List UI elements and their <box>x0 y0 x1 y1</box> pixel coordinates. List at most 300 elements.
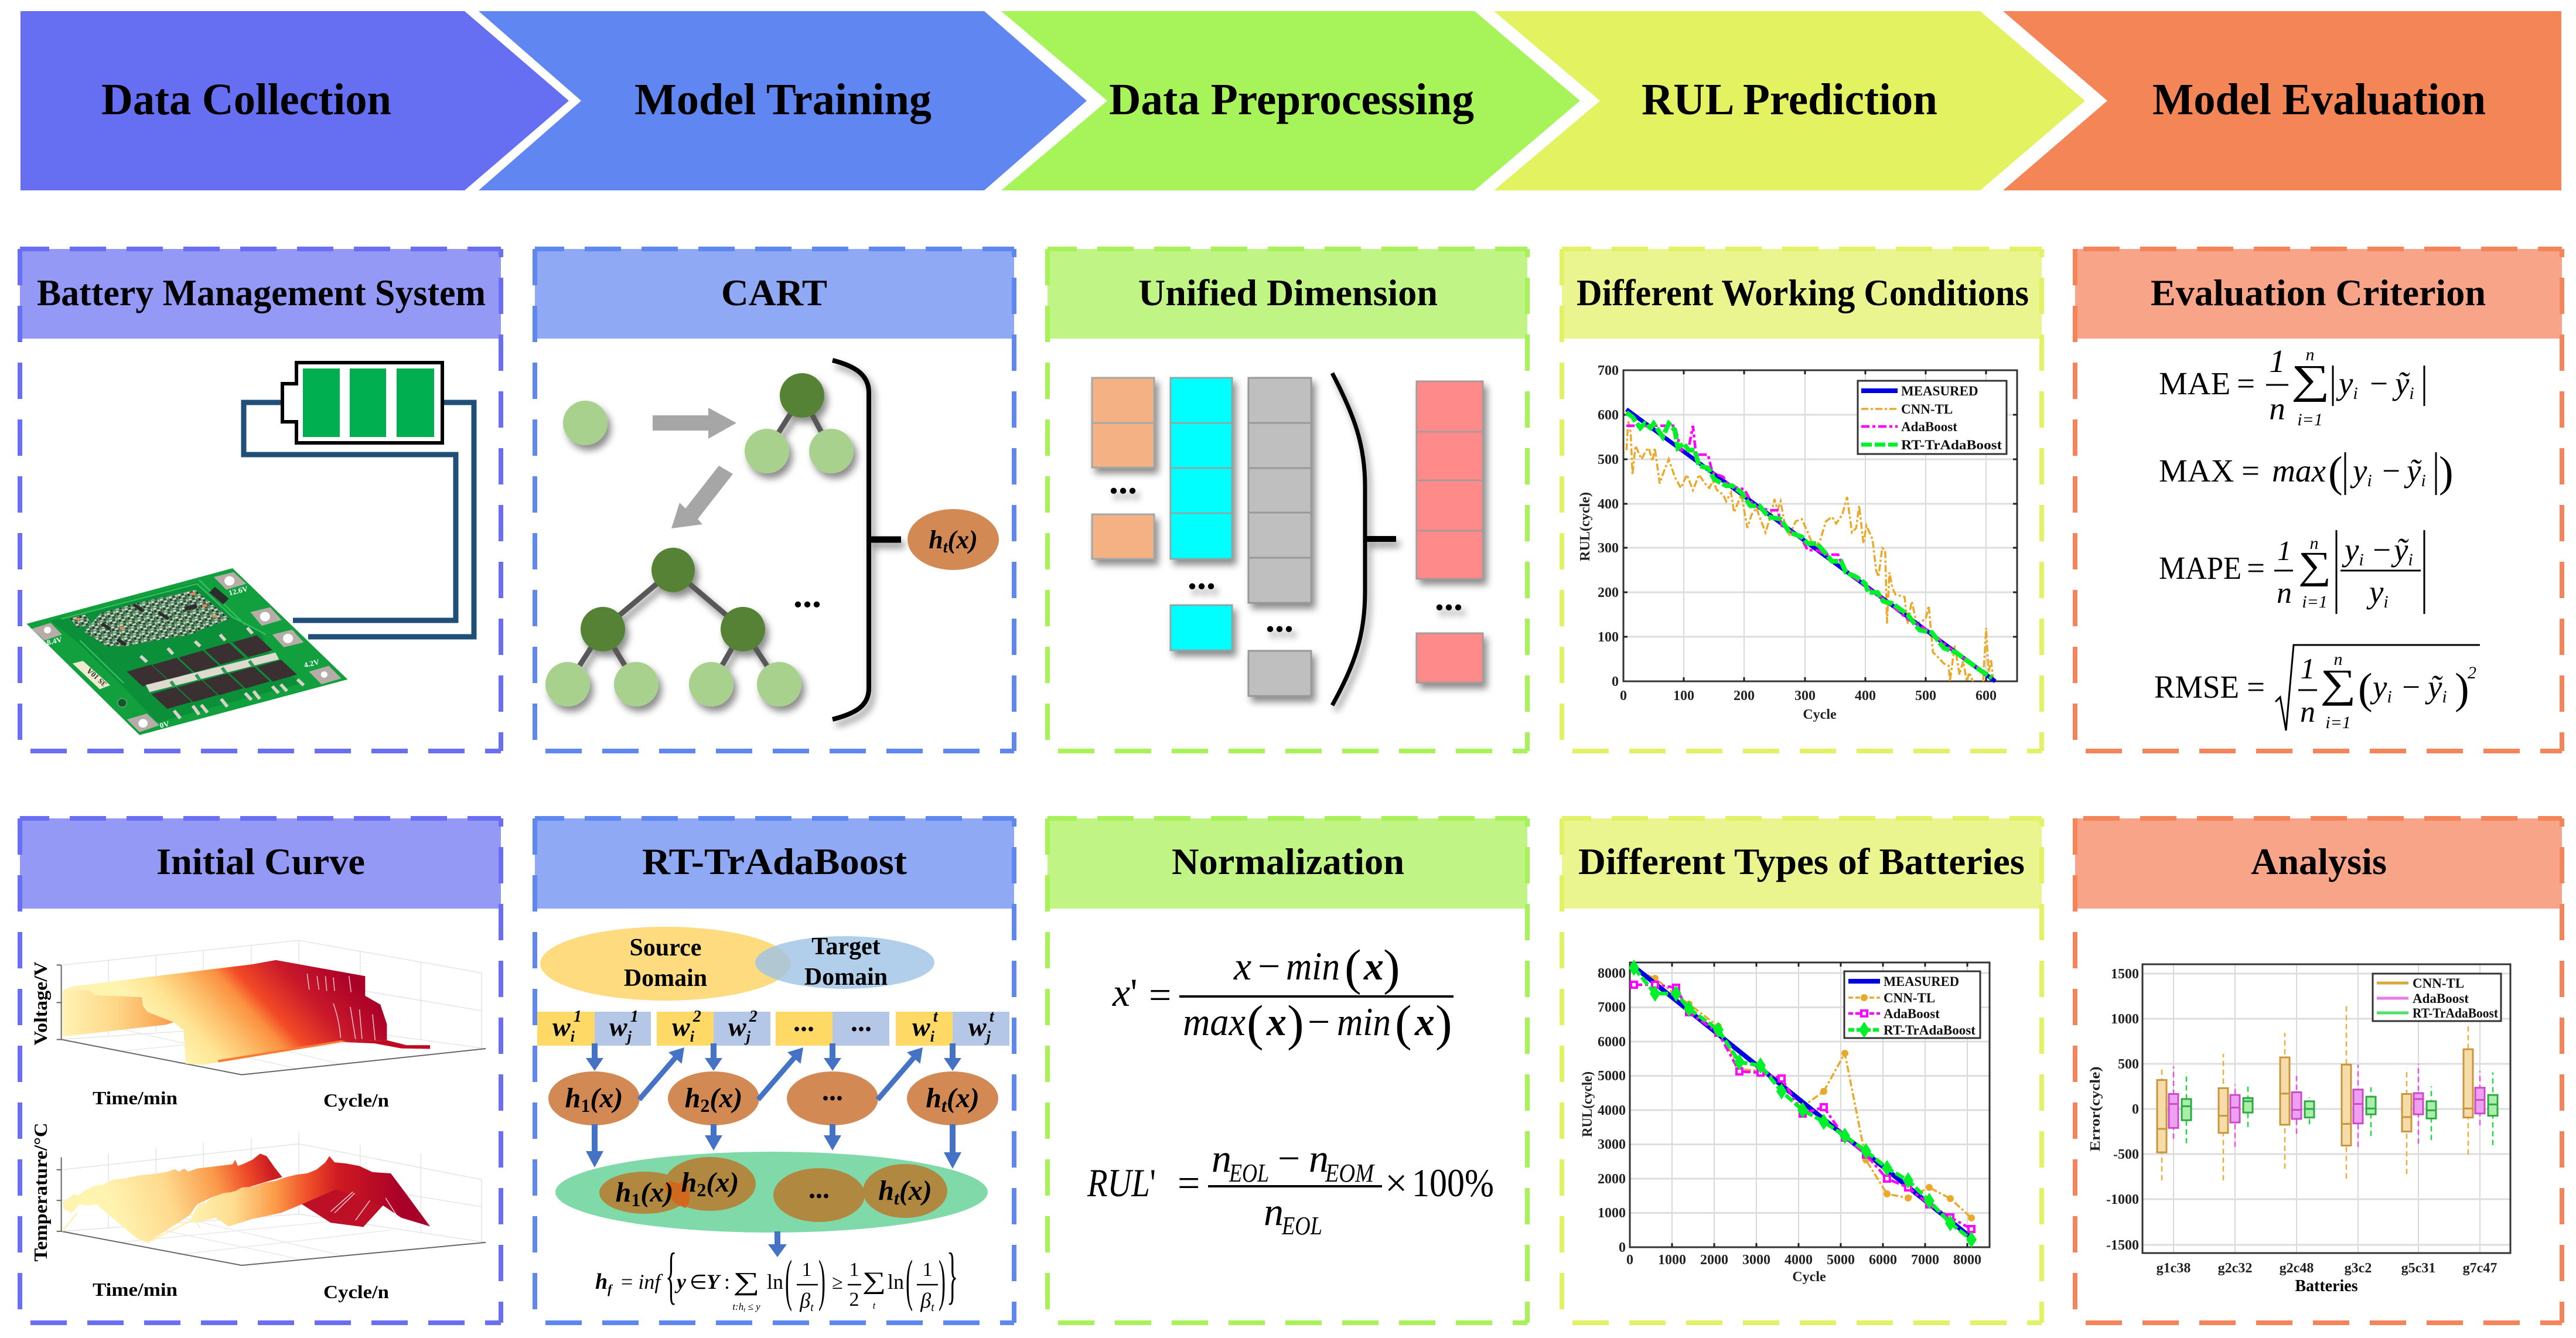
formula: RMSE: 1 <box>2300 652 2315 685</box>
formula: final hypothesis: 2 <box>849 1289 859 1310</box>
ellipsis: ... <box>793 574 821 615</box>
weight cells: 1 <box>630 1008 639 1026</box>
board labels: 0V <box>159 719 170 730</box>
formula: MAPE: i <box>2408 550 2413 569</box>
arrows: learner to next weights <box>637 1047 923 1101</box>
domain: source <box>540 927 791 1001</box>
box plot: error by battery: g2c32 <box>2218 1261 2252 1276</box>
board transistors <box>127 636 297 709</box>
formula: RMSE: i <box>2387 687 2392 706</box>
formula: MAE: − <box>2370 366 2388 401</box>
box plot: error by battery: g7c47 <box>2463 1261 2497 1276</box>
formula: final hypothesis: h <box>595 1269 608 1294</box>
formula: RMSE: i <box>2442 687 2447 706</box>
box plot: error by battery: 1000 <box>2111 1012 2139 1027</box>
formula: final hypothesis: t <box>931 1301 934 1314</box>
line chart: working conditions: 500 <box>1915 688 1936 704</box>
formula: MAPE: i=1 <box>2302 592 2328 612</box>
weak learners <box>548 1071 998 1125</box>
boxes: g5c31 <box>2402 1064 2436 1174</box>
node: ht(x): t <box>943 538 948 557</box>
line chart: working conditions: 700 <box>1598 363 1619 378</box>
line chart: battery types: 0 <box>1619 1240 1626 1255</box>
box plot: error by battery: g1c38 <box>2157 1261 2191 1276</box>
formula: RMSE: 2 <box>2468 663 2476 682</box>
legend <box>1858 381 2007 454</box>
ensemble: (x) <box>706 1167 739 1198</box>
formula: MAPE: i <box>2359 550 2364 569</box>
line chart: battery types: 2000 <box>1700 1252 1728 1268</box>
root node <box>563 401 608 445</box>
line chart: working conditions: 200 <box>1598 585 1619 600</box>
weight cells: ... <box>793 1006 814 1037</box>
heading: Different Working Conditions: Different Working Conditions <box>1577 272 2029 313</box>
weight cells: t <box>933 1008 939 1026</box>
line chart: working conditions: 600 <box>1598 408 1619 423</box>
line chart: working conditions: 0 <box>1620 688 1627 704</box>
formula: RUL normalization: RUL' <box>1087 1160 1156 1205</box>
weight cells: i <box>571 1028 575 1045</box>
formula: final hypothesis: t <box>810 1301 814 1314</box>
step: Data Preprocessing <box>1001 11 1580 190</box>
panel: CART <box>535 249 1014 751</box>
weight cells: j <box>744 1028 751 1045</box>
formula: final hypothesis: ≤ y <box>745 1301 760 1312</box>
formula: MAE: MAE <box>2159 366 2230 401</box>
formula: MAE: 1 <box>2269 343 2285 379</box>
formula: min-max normalization: ( <box>1395 995 1412 1051</box>
ellipsis marks: ... <box>1109 460 1137 501</box>
weight cells <box>537 1006 1009 1046</box>
step: Model Evaluation <box>2003 11 2561 190</box>
legend: MEASURED <box>1884 974 1959 989</box>
boxes: g7c47 <box>2464 1023 2497 1155</box>
formula: final hypothesis: 1 <box>801 1259 812 1281</box>
heading: Initial Curve: Initial Curve <box>156 841 365 882</box>
formula: MAPE: 1 <box>2277 535 2291 566</box>
column: cyan data <box>1171 378 1232 650</box>
formula: MAPE: = <box>2247 550 2265 586</box>
formula: MAX: = <box>2241 453 2260 489</box>
formula: MAE: n <box>2306 345 2314 364</box>
line chart: battery types: 4000 <box>1785 1252 1813 1268</box>
formula: MAE: = <box>2237 366 2255 401</box>
weight cells: j <box>984 1028 991 1045</box>
formula: RMSE: n <box>2300 695 2315 729</box>
formula: RUL normalization: EOL <box>1229 1159 1269 1187</box>
formula: RMSE: y <box>2373 669 2387 705</box>
weight cells: ... <box>851 1006 872 1037</box>
legend: AdaBoost <box>1901 419 1957 434</box>
formula: MAX: ỹ <box>2407 453 2421 489</box>
heading: Unified Dimension: Unified Dimension <box>1138 272 1438 313</box>
boxes: g1c38 <box>2157 1066 2191 1180</box>
wires between battery and board <box>244 402 474 637</box>
box plot: error by battery: g2c48 <box>2280 1261 2314 1276</box>
formula: final hypothesis: y <box>674 1270 687 1293</box>
weight cells: w <box>968 1012 987 1042</box>
formula: final hypothesis: t <box>743 1306 746 1313</box>
formula: min-max normalization: = <box>1149 972 1171 1017</box>
formula: final hypothesis: t:h <box>732 1301 743 1312</box>
domain labels <box>624 933 888 992</box>
formula: min-max normalization: x <box>1414 999 1435 1044</box>
panel: Initial Curve <box>20 818 501 1323</box>
formula: final hypothesis: f <box>608 1282 613 1296</box>
line chart: working conditions: 400 <box>1598 497 1619 512</box>
formula: min-max normalization: x <box>1363 944 1384 988</box>
arrow: grow right <box>653 408 736 439</box>
weak learners: ... <box>822 1076 843 1107</box>
ellipsis marks: ... <box>1435 576 1463 618</box>
formula: min-max normalization: max <box>1183 999 1246 1044</box>
formula: final hypothesis: } <box>947 1240 958 1310</box>
panel: Unified Dimension <box>1048 249 1527 751</box>
formula: MAX: ( <box>2328 448 2343 496</box>
formula: min-max normalization: ( <box>1247 995 1264 1051</box>
icon: circuit board <box>26 568 347 735</box>
formula: min-max normalization: x <box>1233 944 1251 988</box>
line chart: battery types: 2000 <box>1598 1172 1626 1187</box>
formula: final hypothesis: { <box>666 1240 677 1310</box>
box plot: error by battery: -1500 <box>2106 1238 2139 1253</box>
legend: AdaBoost <box>1884 1006 1940 1021</box>
board transistor pins <box>141 628 303 718</box>
box plot: error by battery <box>2088 964 2510 1295</box>
ensemble <box>555 1152 988 1233</box>
step: Model Evaluation: Model Evaluation <box>2152 75 2486 124</box>
node: ht(x): h <box>929 525 943 554</box>
formula: final hypothesis: β <box>920 1289 931 1312</box>
brace <box>832 360 901 719</box>
formula: MAPE: ỹ <box>2394 532 2408 568</box>
board labels: 12.6V <box>227 584 249 597</box>
line chart: battery types: 6000 <box>1598 1035 1626 1050</box>
formula: MAPE: − <box>2373 532 2391 568</box>
domain labels: Source <box>630 934 701 961</box>
weak learners: (x) <box>947 1083 980 1114</box>
weak learners: 1 <box>581 1095 590 1116</box>
weight cells: w <box>912 1012 930 1042</box>
surface chart: voltage: Voltage/V <box>30 962 51 1045</box>
formula: MAX: ) <box>2439 448 2454 496</box>
formula: MAE: y <box>2339 366 2353 401</box>
box plot: error by battery: -500 <box>2113 1147 2139 1162</box>
line chart: battery types: 8000 <box>1953 1252 1981 1268</box>
domain labels: Domain <box>804 964 888 991</box>
formula: MAPE: n <box>2277 576 2292 610</box>
formula: RMSE <box>2154 645 2480 732</box>
domain: target <box>755 936 934 989</box>
heading: Normalization: Normalization <box>1172 841 1404 882</box>
weight cells: w <box>552 1012 571 1042</box>
ensemble: h <box>681 1167 697 1198</box>
line chart: working conditions: RUL(cycle) <box>1578 492 1593 561</box>
line chart: battery types: 4000 <box>1598 1103 1626 1118</box>
step: Model Training <box>479 11 1087 190</box>
brace <box>1332 373 1396 705</box>
weight cells: i <box>690 1028 695 1045</box>
formula: final hypothesis: ln <box>888 1270 904 1293</box>
formula: final hypothesis: 1 <box>849 1259 859 1281</box>
panel: Different Types of Batteries <box>1562 818 2042 1323</box>
line chart: battery types: 6000 <box>1869 1252 1897 1268</box>
formula: min-max normalization: ) <box>1435 995 1452 1051</box>
formula: final hypothesis: ln <box>767 1270 783 1293</box>
column: gray data <box>1248 378 1311 696</box>
line chart: battery types: 5000 <box>1827 1252 1855 1268</box>
weak learners: h <box>565 1083 581 1114</box>
formula: MAE <box>2159 343 2424 429</box>
formula: min-max normalization: ( <box>1345 939 1362 995</box>
formula: final hypothesis: ( <box>906 1249 913 1312</box>
formula: RUL normalization: − <box>1278 1136 1300 1180</box>
formula: RUL normalization <box>1087 1136 1494 1240</box>
formula: MAE: ỹ <box>2395 366 2409 401</box>
surface chart: voltage: Time/min <box>93 1087 178 1108</box>
weight cells: t <box>990 1008 995 1026</box>
domain labels: Domain <box>624 965 707 992</box>
weak learners: h <box>685 1083 700 1114</box>
formula: final hypothesis: ( <box>785 1249 792 1312</box>
surface chart: voltage <box>30 940 486 1111</box>
formula: final hypothesis: β <box>800 1289 810 1312</box>
legend: RT-TrAdaBoost <box>1901 438 2002 452</box>
line chart: battery types: 3000 <box>1742 1252 1770 1268</box>
weight cells: w <box>728 1012 746 1042</box>
panel: Evaluation Criterion <box>2075 249 2562 751</box>
weak learners: t <box>941 1095 947 1116</box>
arrows: learners to ensemble <box>586 1124 961 1169</box>
line chart: battery types: 3000 <box>1598 1137 1626 1152</box>
line chart: battery types: 7000 <box>1598 1000 1626 1015</box>
process banner <box>21 11 2561 190</box>
weight cells: j <box>625 1028 632 1045</box>
box plot: error by battery: Batteries <box>2295 1277 2358 1295</box>
line chart: battery types: 7000 <box>1911 1252 1939 1268</box>
formula: final hypothesis: 1 <box>922 1259 933 1281</box>
formula: RMSE: n <box>2334 650 2342 669</box>
box plot: error by battery: g3c2 <box>2345 1261 2372 1276</box>
weight cells: i <box>930 1028 935 1045</box>
legend: MEASURED <box>1901 384 1978 398</box>
formula: RUL normalization: EOM <box>1325 1159 1375 1187</box>
formula: MAPE: y <box>2369 574 2383 610</box>
step: RUL Prediction: RUL Prediction <box>1642 75 1937 124</box>
weight cells: 2 <box>749 1008 758 1026</box>
ensemble: (x) <box>640 1177 673 1208</box>
heading: Battery Management System: Battery Management System <box>37 272 486 313</box>
formula: MAPE: i <box>2383 592 2389 612</box>
board labels: 8.4V <box>46 635 63 647</box>
panel: RT-TrAdaBoost <box>535 818 1014 1323</box>
formula: min-max normalization: x' <box>1112 970 1137 1015</box>
line chart: working conditions: 100 <box>1598 630 1619 645</box>
line chart: battery types: 1000 <box>1598 1206 1626 1221</box>
small tree <box>745 373 854 473</box>
line chart: working conditions: 300 <box>1598 541 1619 556</box>
panel: Different Working Conditions <box>1562 249 2042 751</box>
formula: MAX: y <box>2353 453 2367 489</box>
ensemble: 2 <box>697 1179 706 1200</box>
line chart: battery types <box>1580 960 1990 1285</box>
formula: MAPE: y <box>2345 532 2359 568</box>
formula: min-max normalization: min <box>1286 944 1340 988</box>
ellipsis marks <box>1109 460 1463 640</box>
step: Data Collection <box>21 11 569 190</box>
surface chart: temperature <box>30 1122 486 1302</box>
formula: MAX <box>2159 448 2454 496</box>
formula: MAE: n <box>2269 391 2285 426</box>
board pads <box>32 572 342 732</box>
board labels <box>46 584 320 730</box>
node: ht(x) <box>907 509 999 570</box>
line chart: working conditions: 500 <box>1598 452 1619 467</box>
formula: final hypothesis: ) <box>939 1249 946 1312</box>
formula: min-max normalization: min <box>1337 999 1391 1044</box>
formula: MAE: ∑ <box>2291 357 2330 402</box>
heading: CART: CART <box>721 272 827 313</box>
legend <box>1844 971 1980 1038</box>
weight cells: w <box>609 1012 627 1042</box>
surface chart: temperature: Cycle/n <box>323 1281 389 1302</box>
ellipsis marks: ... <box>1265 598 1294 640</box>
step: Data Preprocessing: Data Preprocessing <box>1109 75 1474 124</box>
panel: Analysis <box>2075 818 2562 1323</box>
formula: final hypothesis <box>595 1240 958 1314</box>
formula: final hypothesis: : <box>724 1270 730 1293</box>
arrow: grow down <box>671 466 733 528</box>
boxes: g3c2 <box>2342 1004 2376 1179</box>
line chart: working conditions: 600 <box>1975 688 1997 704</box>
column: unified output <box>1417 381 1483 682</box>
step: RUL Prediction <box>1494 11 2085 190</box>
formula: min-max normalization: − <box>1308 999 1330 1044</box>
ensemble: h <box>878 1175 894 1206</box>
formula: MAX: i <box>2367 471 2372 490</box>
ensemble: 1 <box>631 1189 640 1210</box>
box plot: error by battery: 500 <box>2118 1057 2139 1072</box>
panel: Normalization <box>1048 818 1527 1323</box>
ellipsis marks: ... <box>1188 555 1216 597</box>
formula: RMSE: i=1 <box>2325 713 2351 732</box>
legend: AdaBoost <box>2413 991 2469 1006</box>
line chart: working conditions: 100 <box>1673 688 1694 704</box>
formula: RMSE: ) <box>2455 665 2469 713</box>
line chart: working conditions: 200 <box>1734 688 1755 704</box>
weak learners: h <box>926 1083 941 1114</box>
line chart: working conditions: 0 <box>1612 674 1619 690</box>
line chart: battery types: RUL(cycle) <box>1580 1071 1595 1137</box>
formula: final hypothesis: ∈ <box>690 1272 707 1293</box>
legend <box>2373 974 2501 1021</box>
line chart: working conditions: 400 <box>1855 688 1876 704</box>
arrow: ensemble to final formula <box>768 1231 787 1257</box>
line chart: working conditions: Cycle <box>1803 707 1837 722</box>
boxes: g2c48 <box>2280 1033 2314 1169</box>
formula: RMSE: ∑ <box>2320 661 2356 706</box>
formula: MAPE: ∑ <box>2298 544 2331 586</box>
formula: MAE: i <box>2409 384 2414 403</box>
formula: MAPE <box>2159 530 2424 614</box>
arrows: weights to learners <box>586 1043 961 1071</box>
formula: MAPE: n <box>2309 534 2319 553</box>
formula: RUL normalization: n <box>1212 1136 1231 1180</box>
heading: Different Types of Batteries: Different Types of Batteries <box>1578 841 2025 882</box>
step: Model Training: Model Training <box>634 75 932 124</box>
legend: CNN-TL <box>1884 991 1935 1005</box>
box plot: error by battery: Error(cycle) <box>2088 1066 2103 1152</box>
board labels: 3S 10A <box>84 666 108 688</box>
formula: RUL normalization: EOL <box>1281 1211 1322 1240</box>
line chart: working conditions: 300 <box>1794 688 1816 704</box>
formula: final hypothesis: = inf <box>621 1270 663 1293</box>
formula: MAX: max <box>2272 453 2326 489</box>
formula: RUL normalization: = <box>1178 1160 1200 1205</box>
formula: MAX: MAX <box>2159 453 2234 489</box>
line chart: battery types: 5000 <box>1598 1069 1626 1084</box>
legend: CNN-TL <box>1901 402 1953 417</box>
box plot: error by battery: 1500 <box>2111 967 2139 982</box>
box plot: error by battery: -1000 <box>2106 1192 2139 1207</box>
formula: final hypothesis: ∑ <box>733 1267 760 1296</box>
column: orange data <box>1092 378 1154 559</box>
formula: final hypothesis: ) <box>818 1249 825 1312</box>
formula: RUL normalization: n <box>1309 1136 1329 1180</box>
formula: final hypothesis: t <box>873 1300 876 1311</box>
ensemble: h <box>616 1177 631 1208</box>
box plot: error by battery: g5c31 <box>2401 1261 2435 1276</box>
boxes: g2c32 <box>2219 1054 2253 1180</box>
icon: battery <box>282 363 442 443</box>
formula: final hypothesis: Y <box>707 1270 721 1293</box>
formula: min-max normalization: x <box>1266 999 1287 1044</box>
formula: MAE: i <box>2353 384 2358 403</box>
formula: min-max normalization: ) <box>1383 939 1400 995</box>
heading: Evaluation Criterion: Evaluation Criterion <box>2151 272 2486 313</box>
surface chart: temperature: Time/min <box>93 1279 178 1300</box>
line chart: battery types: 1000 <box>1658 1252 1686 1268</box>
formula: min-max normalization <box>1112 939 1454 1051</box>
weak learners: (x) <box>709 1083 742 1114</box>
formula: MAE: i=1 <box>2297 410 2323 429</box>
weight cells: w <box>672 1012 690 1042</box>
line chart: battery types: 0 <box>1626 1252 1633 1268</box>
weight cells: 1 <box>574 1008 582 1026</box>
large tree <box>545 548 801 706</box>
ensemble: ... <box>808 1173 830 1204</box>
formula: RMSE: RMSE <box>2154 669 2239 705</box>
formula: MAX: − <box>2382 453 2400 489</box>
line chart: battery types: Cycle <box>1792 1269 1826 1285</box>
formula: min-max normalization: − <box>1258 944 1280 988</box>
formula: final hypothesis: ∑ <box>862 1267 886 1294</box>
legend: RT-TrAdaBoost <box>1884 1023 1975 1037</box>
weak learners: (x) <box>590 1083 623 1114</box>
line chart: battery types: 8000 <box>1598 966 1626 981</box>
heading: RT-TrAdaBoost: RT-TrAdaBoost <box>642 841 907 882</box>
ensemble: t <box>894 1187 900 1209</box>
formula: RMSE: = <box>2247 669 2265 705</box>
box plot: error by battery: 0 <box>2132 1102 2139 1117</box>
formula: RUL normalization: 100% <box>1412 1160 1494 1205</box>
formula: RUL normalization: × <box>1385 1160 1407 1205</box>
panel: Battery Management System <box>20 249 501 751</box>
weight cells: 2 <box>692 1008 701 1026</box>
heading: Analysis: Analysis <box>2251 841 2387 882</box>
surface chart: voltage: Cycle/n <box>323 1090 389 1111</box>
surface chart: temperature: Temperature/°C <box>30 1123 51 1261</box>
